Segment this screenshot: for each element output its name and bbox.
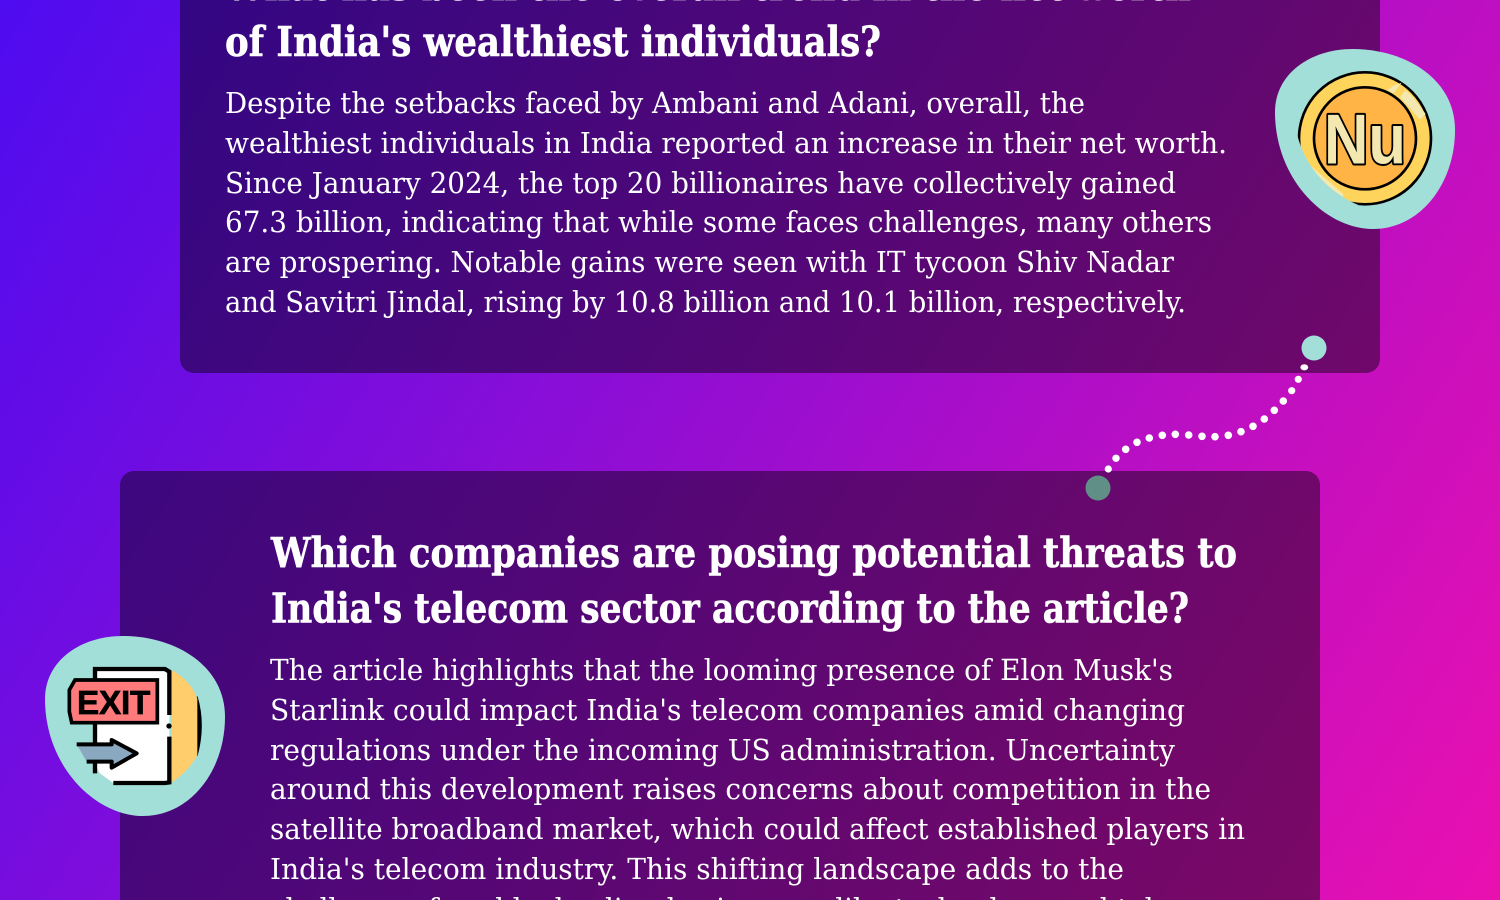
text block: telecom threats answer: regulations under the incoming US administration. Uncertainty — [270, 734, 1176, 767]
text block: wealth trend answer: 67.3 billion, indicating that while some faces challenges, many others — [225, 206, 1212, 239]
connector end dot — [1086, 476, 1110, 500]
heading: telecom threats: India's telecom sector according to the article? — [271, 584, 1189, 632]
icon: Nu coin badge — [1275, 49, 1455, 229]
text block: wealth trend answer: Since January 2024, the top 20 billionaires have collectively gained — [225, 167, 1176, 200]
text block: telecom threats answer: India's telecom industry. This shifting landscape adds to the — [270, 853, 1124, 886]
heading: telecom threats: Which companies are posing potential threats to — [270, 529, 1237, 577]
panel: telecom threats — [120, 471, 1320, 900]
text block: wealth trend answer: wealthiest individuals in India reported an increase in their net worth. — [225, 127, 1227, 160]
text block: wealth trend answer — [225, 87, 1227, 319]
heading: wealth trend — [224, 0, 1191, 66]
text block: wealth trend answer: Despite the setbacks faced by Ambani and Adani, overall, the — [225, 87, 1085, 120]
icon: exit door badge: EXIT — [77, 685, 150, 722]
text block: telecom threats answer: satellite broadband market, which could affect established players in — [270, 813, 1245, 846]
text block: wealth trend answer: and Savitri Jindal, rising by 10.8 billion and 10.1 billion, respectively. — [225, 286, 1186, 319]
text block: telecom threats answer — [270, 654, 1245, 900]
text block: telecom threats answer: around this development raises concerns about competition in the — [270, 773, 1211, 806]
connector: dotted path — [1086, 336, 1326, 500]
icon: Nu coin badge: Nu — [1324, 99, 1406, 178]
text block: telecom threats answer: Starlink could impact India's telecom companies amid changing — [270, 694, 1185, 727]
heading: telecom threats — [270, 529, 1237, 632]
connector start dot — [1302, 336, 1326, 360]
text block: telecom threats answer: The article highlights that the looming presence of Elon Musk's — [270, 654, 1173, 687]
panel: wealth trend — [180, 0, 1380, 373]
text block: wealth trend answer: are prospering. Notable gains were seen with IT tycoon Shiv Nadar — [225, 246, 1174, 279]
heading: wealth trend: of India's wealthiest individuals? — [225, 18, 881, 66]
icon: exit door badge — [45, 636, 225, 816]
